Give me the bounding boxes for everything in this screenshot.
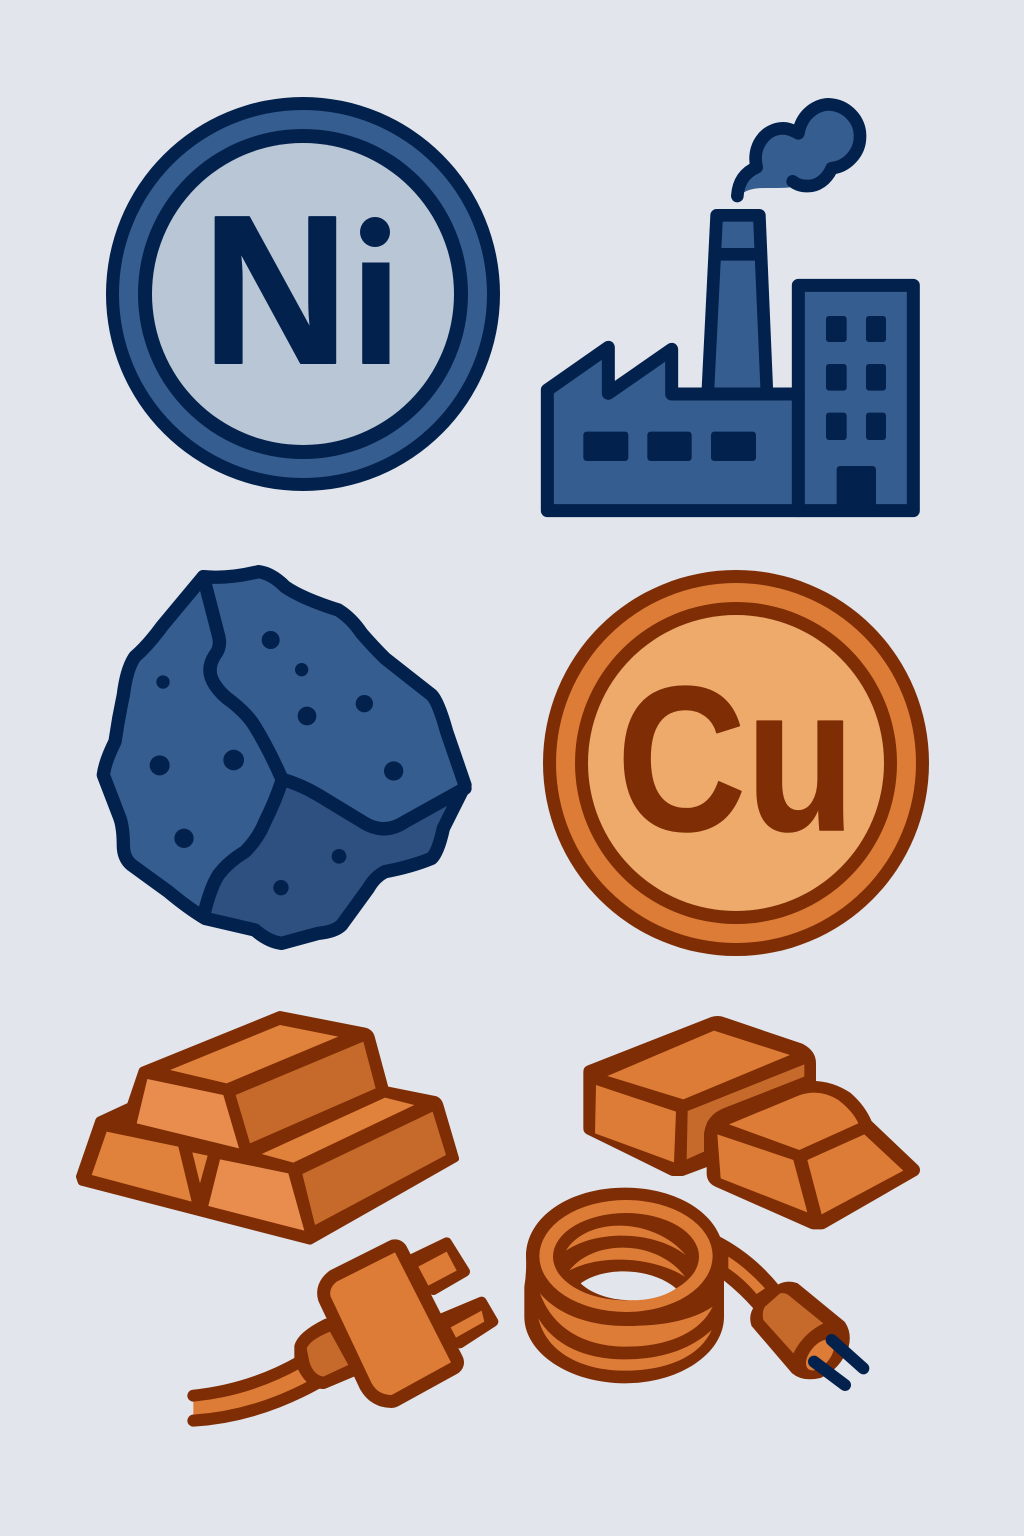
icon: nickel coin: Ni xyxy=(202,171,406,408)
icon: stacked copper ingots xyxy=(80,1015,455,1241)
icon: factory with smoke xyxy=(547,104,913,511)
icon: nickel ore rock xyxy=(103,572,465,943)
icon: copper coin xyxy=(543,570,929,956)
icon: copper bars xyxy=(590,1023,913,1223)
icon: copper coin: Cu xyxy=(617,644,855,874)
icon: copper plug with cord xyxy=(193,1242,493,1421)
icon: coiled copper cable with plug xyxy=(524,1188,863,1385)
icon: nickel coin xyxy=(106,97,500,491)
